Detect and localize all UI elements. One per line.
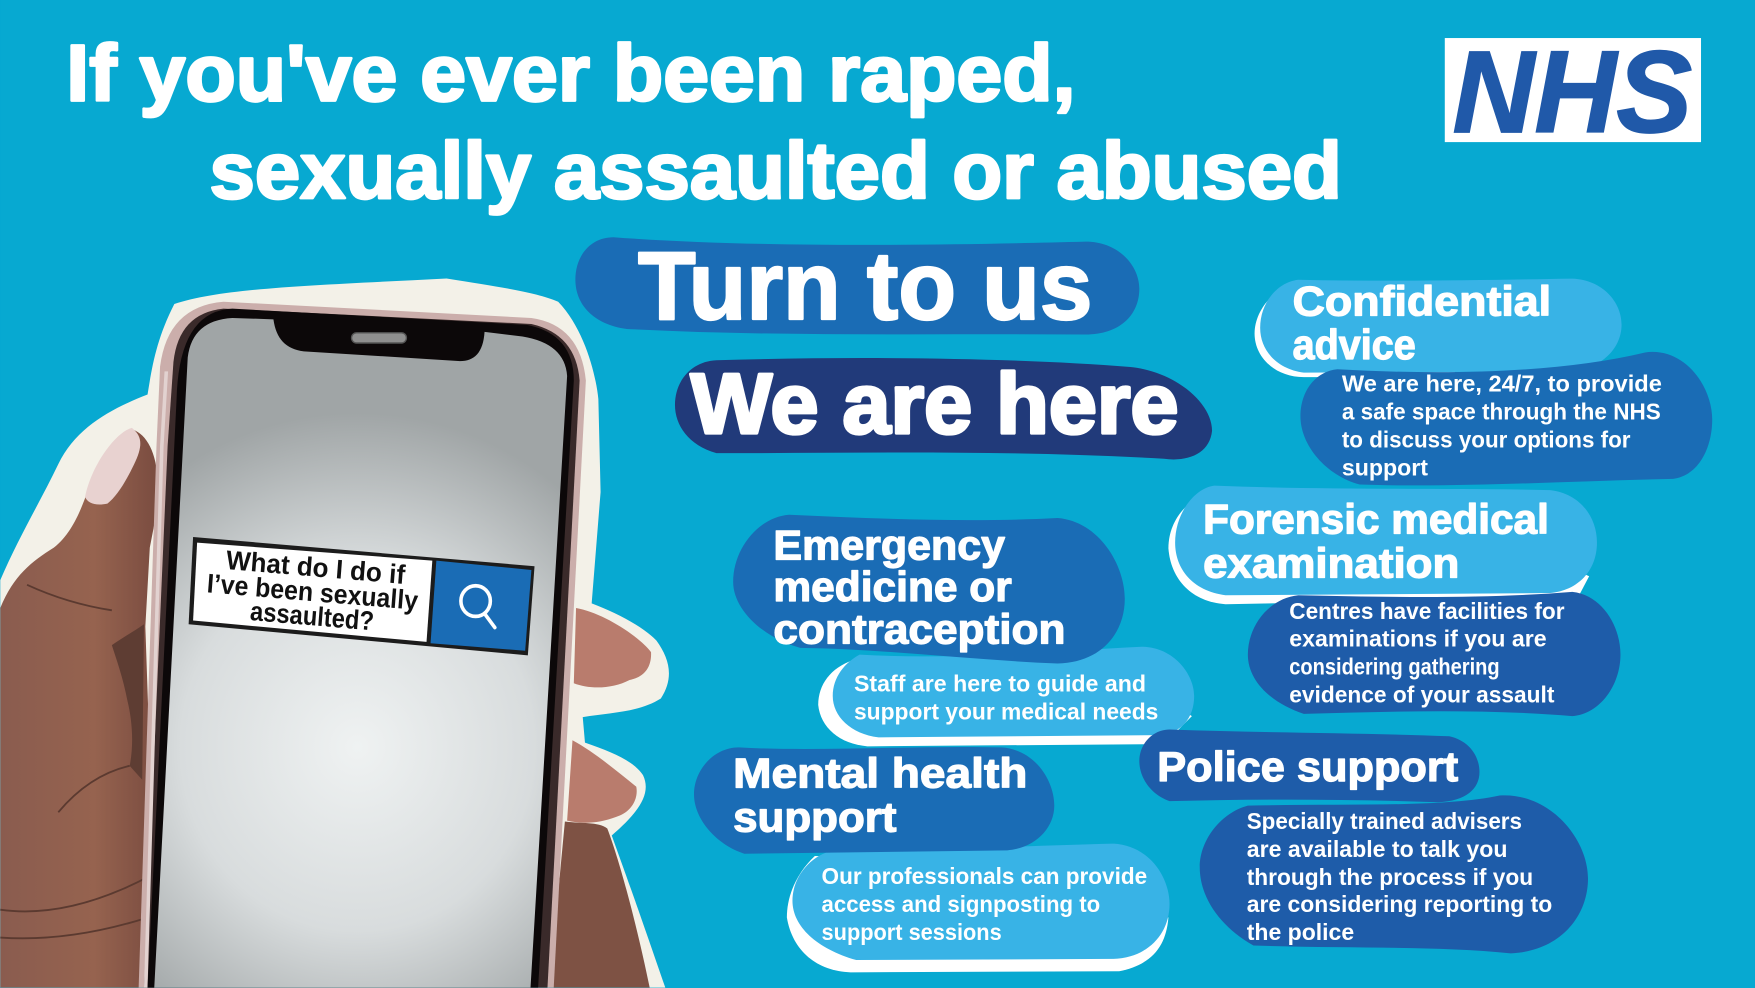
panel: forensic medical examination [1168, 486, 1620, 716]
forensic body: examinations if you are [1289, 626, 1547, 652]
phone speaker [352, 333, 406, 343]
confidential body: We are here, 24/7, to provide [1342, 371, 1662, 397]
panel: emergency medicine heading [733, 515, 1125, 664]
phone bezel [148, 309, 574, 988]
panel: police support body: through the process if you [1247, 864, 1533, 890]
search text: I’ve been sexually [206, 568, 419, 616]
palm shadow and creases [0, 585, 148, 938]
confidential body: support [1342, 455, 1428, 481]
panel: emergency medicine heading: medicine or [773, 564, 1012, 610]
title: If you've ever been raped, [66, 29, 1076, 118]
cream cut-out outline [0, 278, 669, 988]
panel: mental health body [787, 844, 1170, 972]
search bar [189, 537, 535, 655]
panel: police support body: are considering reporting to [1247, 891, 1552, 917]
icon: magnifying glass [461, 586, 495, 628]
forensic heading: Forensic medical [1203, 497, 1549, 543]
panel: mental health body: Our professionals can provide [822, 863, 1147, 889]
panel: mental health body: access and signposting to [822, 891, 1100, 917]
panel: police support heading: Police support [1157, 744, 1458, 790]
panel: police support body: are available to talk you [1247, 836, 1507, 862]
confidential heading: advice [1293, 322, 1416, 368]
panel: mental health heading: Mental health [733, 751, 1027, 797]
phone screen [154, 318, 567, 988]
heading: We are here: We are here [691, 357, 1178, 452]
panel: emergency medicine body: Staff are here to guide and [854, 670, 1146, 696]
panel: mental health heading: support [733, 794, 897, 840]
panel: police support body: Specially trained advisers [1247, 808, 1522, 834]
panel: emergency medicine body [818, 647, 1194, 746]
forensic heading [1203, 497, 1549, 586]
forensic body [1248, 592, 1620, 716]
confidential body: to discuss your options for [1342, 427, 1631, 453]
phone frame [139, 302, 586, 988]
forensic body: considering gathering [1289, 654, 1500, 680]
panel: police support heading [1139, 730, 1479, 802]
title: sexually assaulted or abused [210, 126, 1342, 215]
heading: Turn to us: Turn to us [638, 233, 1092, 340]
panel: police support body [1200, 795, 1588, 953]
confidential body [1300, 352, 1712, 485]
search text [206, 545, 419, 636]
NHS logo: NHS [1453, 27, 1692, 157]
panel: mental health heading [694, 747, 1054, 854]
panel: police support body: the police [1247, 919, 1354, 945]
panel: emergency medicine heading: contraception [773, 606, 1065, 652]
search text: What do I do if [225, 545, 406, 590]
title [66, 29, 1342, 215]
illustration: hand holding phone [0, 278, 669, 988]
search text: assaulted? [249, 596, 375, 636]
lower palm [549, 822, 650, 988]
panel: confidential advice [1255, 279, 1712, 485]
left hand and thumb [0, 429, 157, 988]
right fingers [574, 608, 651, 687]
confidential heading [1293, 279, 1551, 368]
panel: emergency medicine heading: Emergency [773, 522, 1005, 568]
panel: mental health body: support sessions [822, 919, 1002, 945]
thumb nail [85, 428, 140, 504]
forensic body: evidence of your assault [1289, 682, 1555, 708]
confidential heading: Confidential [1293, 279, 1551, 325]
panel: emergency medicine body: support your medical needs [854, 698, 1158, 724]
forensic body: Centres have facilities for [1289, 598, 1565, 624]
forensic heading: examination [1203, 540, 1459, 586]
confidential body: a safe space through the NHS [1342, 399, 1661, 425]
